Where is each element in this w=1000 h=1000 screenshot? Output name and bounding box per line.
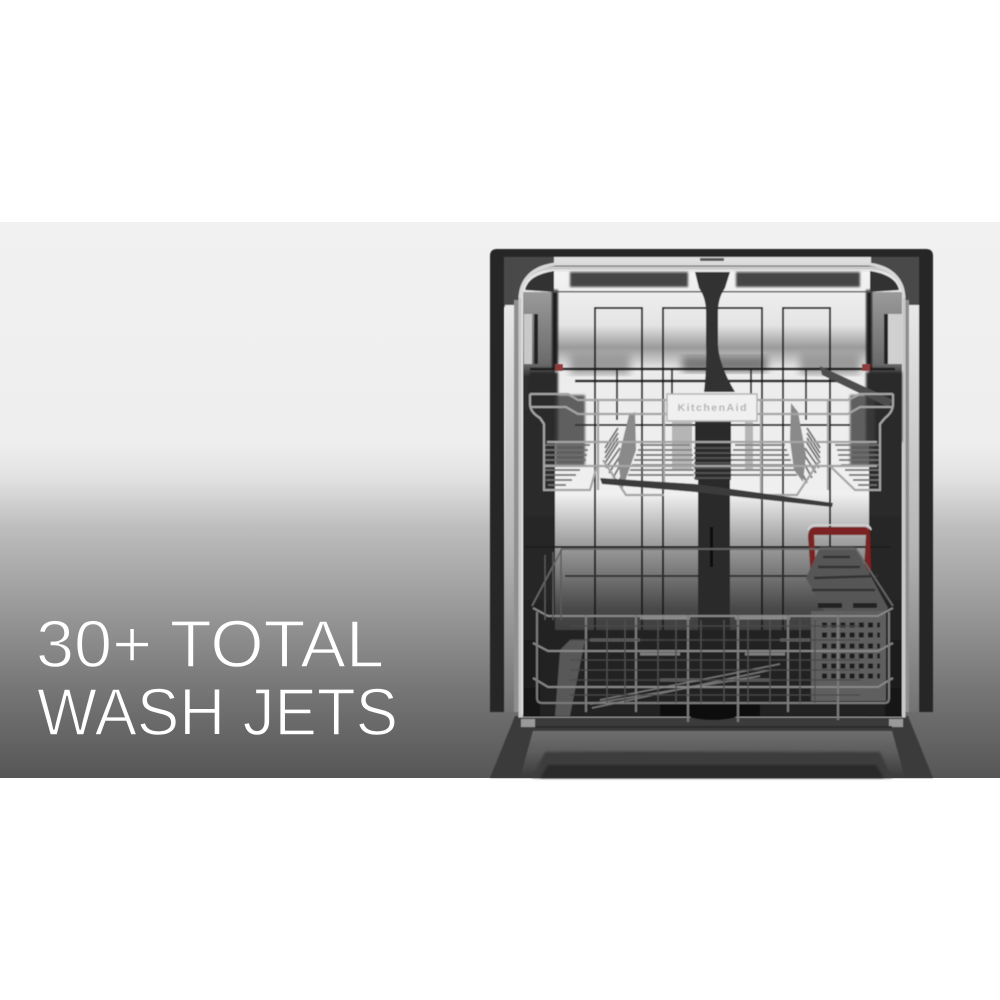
reflections [570, 352, 630, 374]
rear rack grid [525, 308, 895, 712]
dishwasher illustration [490, 249, 933, 778]
open door [490, 716, 933, 778]
door frame [490, 249, 933, 712]
side supports [530, 372, 558, 442]
fold-down tines [618, 412, 636, 490]
back wall [553, 272, 871, 717]
upper rack [530, 364, 902, 507]
brand badge: KitchenAid [678, 402, 746, 414]
side seals [505, 300, 919, 712]
tub interior [520, 268, 904, 717]
silverware basket [806, 525, 888, 701]
dish tines [545, 428, 880, 485]
lower rack [532, 549, 893, 722]
title: 30+ total wash jets: 30+ TOTAL [36, 607, 384, 682]
background band [0, 222, 1000, 778]
floor of tub [540, 618, 885, 720]
knife rail arm [820, 366, 893, 407]
lower spray arm [600, 478, 833, 507]
title: 30+ total wash jets: WASH JETS [37, 675, 398, 750]
brand badge [667, 394, 757, 421]
hinges [521, 719, 903, 728]
top bar [520, 257, 904, 298]
spray tower [695, 272, 735, 715]
side walls [523, 292, 555, 717]
ceiling recesses [570, 272, 688, 287]
title: 30+ total wash jets [36, 607, 398, 750]
rack wires [530, 394, 893, 500]
